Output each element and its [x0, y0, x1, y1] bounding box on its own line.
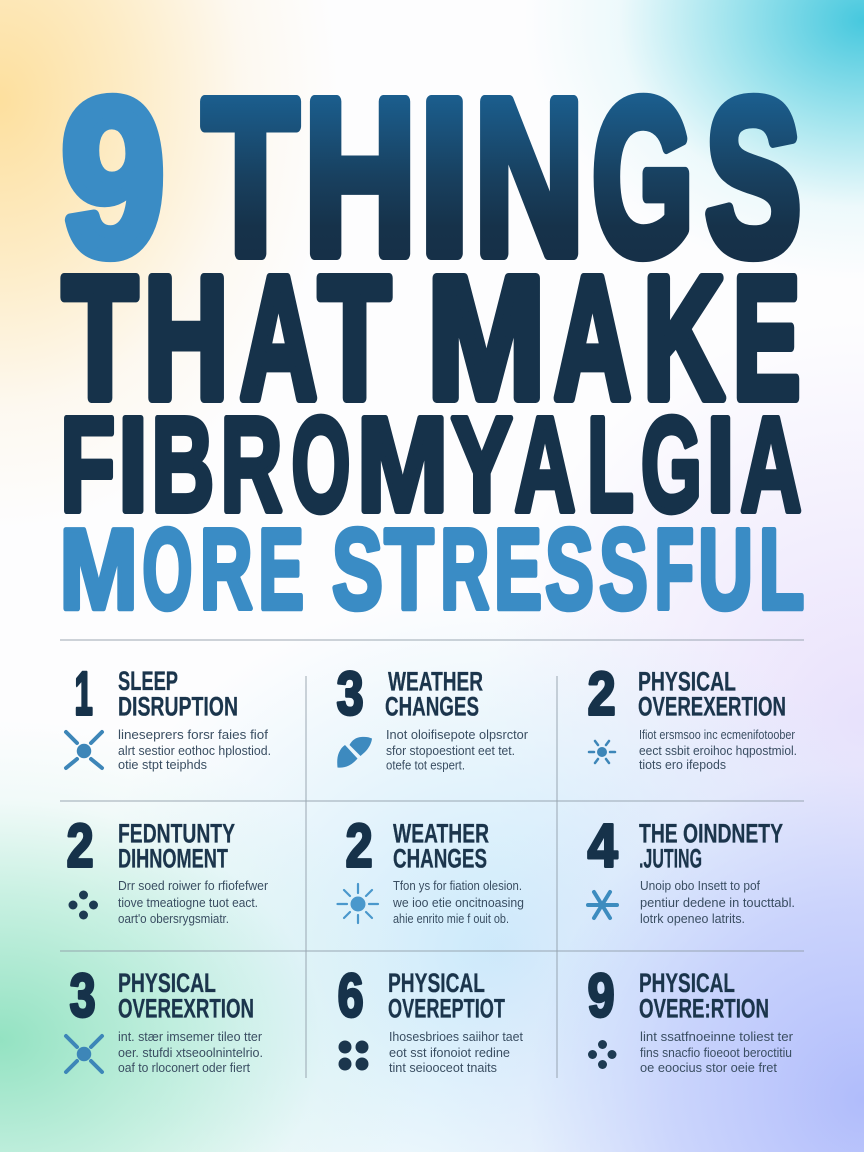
panel: item 1 sleep disruption [66, 660, 271, 772]
heading [118, 968, 254, 1024]
body text: oe eoocius stor oeie fret [640, 1060, 777, 1075]
panel: item 3 weather changes [337, 660, 529, 772]
title line: MORE STRESSFUL: S [599, 506, 648, 633]
title line: FIBROMYALGIA: I [706, 389, 735, 540]
body text [639, 727, 797, 772]
title line: FIBROMYALGIA: O [292, 389, 350, 540]
body text: otie stpt teiphds [118, 757, 207, 772]
title line: THINGS: I [419, 54, 470, 300]
title line: THINGS: S [705, 54, 801, 300]
body text: tiove tmeatiogne tuot eact. [118, 895, 258, 910]
title line: FIBROMYALGIA: F [60, 389, 115, 540]
body text: Ifiot ersmsoo inc ecmenifotoober [639, 727, 796, 742]
title line: FIBROMYALGIA: R [220, 389, 282, 540]
body text [118, 727, 271, 772]
number 6: 6 [338, 962, 364, 1030]
heading [385, 666, 483, 722]
body text: alrt sestior eothoc hplostiod. [118, 743, 271, 758]
heading: PHYSICAL [638, 666, 736, 696]
title line: MORE STRESSFUL: S [332, 506, 383, 633]
title line: FIBROMYALGIA: A [740, 389, 802, 540]
title line: THINGS: G [592, 54, 694, 300]
heading [639, 818, 783, 874]
title line: FIBROMYALGIA: B [151, 389, 214, 540]
heading: OVERE:RTION [639, 994, 769, 1024]
body text [386, 727, 529, 772]
icon: four large dots [338, 1040, 368, 1070]
body text: tint seiooceot tnaits [389, 1060, 497, 1075]
heading [388, 968, 505, 1024]
title line: MORE STRESSFUL: S [545, 506, 594, 633]
body text: otefe tot espert. [386, 758, 465, 772]
title line: MORE STRESSFUL: M [59, 506, 138, 633]
title line: MORE STRESSFUL: U [698, 506, 753, 633]
heading: CHANGES [385, 692, 479, 722]
title line: THAT MAKE: T [319, 240, 391, 435]
heading: CHANGES [393, 844, 487, 874]
number 2: 2 [67, 812, 94, 880]
body text: lotrk openeo latrits. [640, 911, 745, 926]
body text: lineseprers forsr faies fiof [118, 727, 268, 742]
icon: cross with hub [66, 732, 102, 768]
title line: MORE STRESSFUL: R [440, 506, 489, 633]
body text [640, 1029, 794, 1075]
title line: MORE STRESSFUL: F [654, 506, 694, 633]
icon: small sun [589, 741, 615, 763]
body text: int. stær imsemer tileo tter [118, 1029, 263, 1044]
icon: four dots [68, 890, 98, 920]
heading: OVEREPTIOT [388, 994, 505, 1024]
number 4: 4 [588, 812, 618, 880]
body text: lint ssatfnoeinne toliest ter [640, 1029, 794, 1044]
title line: MORE STRESSFUL: L [759, 506, 804, 633]
title line: FIBROMYALGIA: I [118, 389, 148, 540]
body text: oer. stufdi xtseoolnintelrio. [118, 1045, 263, 1060]
panel: item 2 physical overexertion [588, 660, 797, 772]
panel: item 4 the oindnety juting [588, 812, 795, 926]
heading: OVEREXRTION [118, 994, 254, 1024]
heading: PHYSICAL [639, 968, 735, 998]
title line: THINGS: N [474, 54, 584, 300]
title line: FIBROMYALGIA: M [357, 389, 448, 540]
body text: Ihosesbrioes saiihor taet [389, 1029, 523, 1044]
body text: Unoip obo Insett to pof [640, 878, 760, 893]
body text: eot sst ifonoiot redine [389, 1045, 510, 1060]
title line: MORE STRESSFUL: E [494, 506, 542, 633]
title line: THAT MAKE: E [733, 240, 800, 435]
title line: MORE STRESSFUL: O [142, 506, 192, 633]
body text: pentiur dedene in toucttabl. [640, 895, 795, 910]
heading [118, 666, 238, 722]
heading: WEATHER [388, 666, 483, 696]
body text: fins snacfio fioeoot beroctitiu [640, 1045, 792, 1060]
heading: PHYSICAL [118, 968, 216, 998]
number 9: 9 [588, 962, 615, 1030]
body text: sfor stopoestiont eet tet. [386, 743, 515, 758]
panel: item 6 physical overeptiot [338, 962, 523, 1075]
number 2: 2 [346, 812, 373, 880]
body text: tiots ero ifepods [639, 757, 726, 772]
heading [638, 666, 786, 722]
title line: 9: 9 [62, 54, 165, 300]
heading: FEDNTUNTY [118, 818, 235, 848]
title line: MORE STRESSFUL: T [384, 506, 434, 633]
number 1: 1 [74, 660, 93, 728]
title line: THAT MAKE: M [427, 240, 545, 435]
title line: THAT MAKE: A [554, 240, 631, 435]
icon: asterisk [588, 892, 617, 918]
body text [118, 878, 269, 926]
title line: MORE STRESSFUL: R [200, 506, 253, 633]
heading: DIHNOMENT [118, 844, 228, 874]
body text [392, 878, 524, 926]
number 2: 2 [588, 660, 616, 728]
number 3: 3 [70, 962, 96, 1030]
body text: Drr soed roiwer fo rfiofefwer [118, 878, 269, 893]
body text: Tfon ys for fiation olesion. [393, 878, 522, 893]
icon: sun [338, 884, 378, 923]
body text: Inot oloifisepote olpsrctor [386, 727, 529, 742]
body text [389, 1029, 523, 1075]
number 3: 3 [337, 660, 364, 728]
title line: FIBROMYALGIA: L [587, 389, 634, 540]
panel: item 9 physical overe:rtion [588, 962, 794, 1075]
panel: item 3 physical overexrtion [66, 962, 263, 1075]
heading: .JUTING [639, 844, 702, 874]
heading [118, 818, 235, 874]
title line: THINGS: H [304, 54, 416, 300]
icon: four dots [588, 1040, 616, 1069]
title line: THINGS: T [203, 54, 298, 300]
heading: THE OINDNETY [639, 818, 783, 848]
title line: MORE STRESSFUL: E [258, 506, 304, 633]
heading [639, 968, 769, 1024]
body text: eect ssbit eroihoc hqpostmiol. [639, 743, 797, 758]
heading: SLEEP [118, 666, 178, 696]
title line: FIBROMYALGIA: Y [451, 389, 512, 540]
title line: THAT MAKE: A [240, 240, 317, 435]
body text: oaf to rloconert oder fiert [118, 1060, 250, 1075]
icon: petals [337, 737, 372, 768]
icon: cross with hub [66, 1036, 102, 1072]
panel: item 2 weather changes [338, 812, 524, 926]
heading: DISRUPTION [118, 692, 238, 722]
body text: ahie enrito mie f ouit ob. [393, 911, 509, 926]
heading: PHYSICAL [388, 968, 485, 998]
body text: oart'o obersrygsmiatr. [118, 911, 229, 926]
title line: THAT MAKE: T [62, 240, 138, 435]
body text [118, 1029, 263, 1075]
title [59, 54, 804, 633]
panel: item 2 fedntunty dihnoment [67, 812, 269, 926]
title line: THAT MAKE: K [643, 240, 724, 435]
heading: OVEREXERTION [638, 692, 786, 722]
title line: FIBROMYALGIA: G [641, 389, 702, 540]
title line: FIBROMYALGIA: A [514, 389, 576, 540]
title line: THAT MAKE: H [144, 240, 228, 435]
heading [393, 818, 489, 874]
body text: we ioo etie oncitnoasing [392, 895, 524, 910]
body text [640, 878, 795, 926]
heading: WEATHER [393, 818, 489, 848]
